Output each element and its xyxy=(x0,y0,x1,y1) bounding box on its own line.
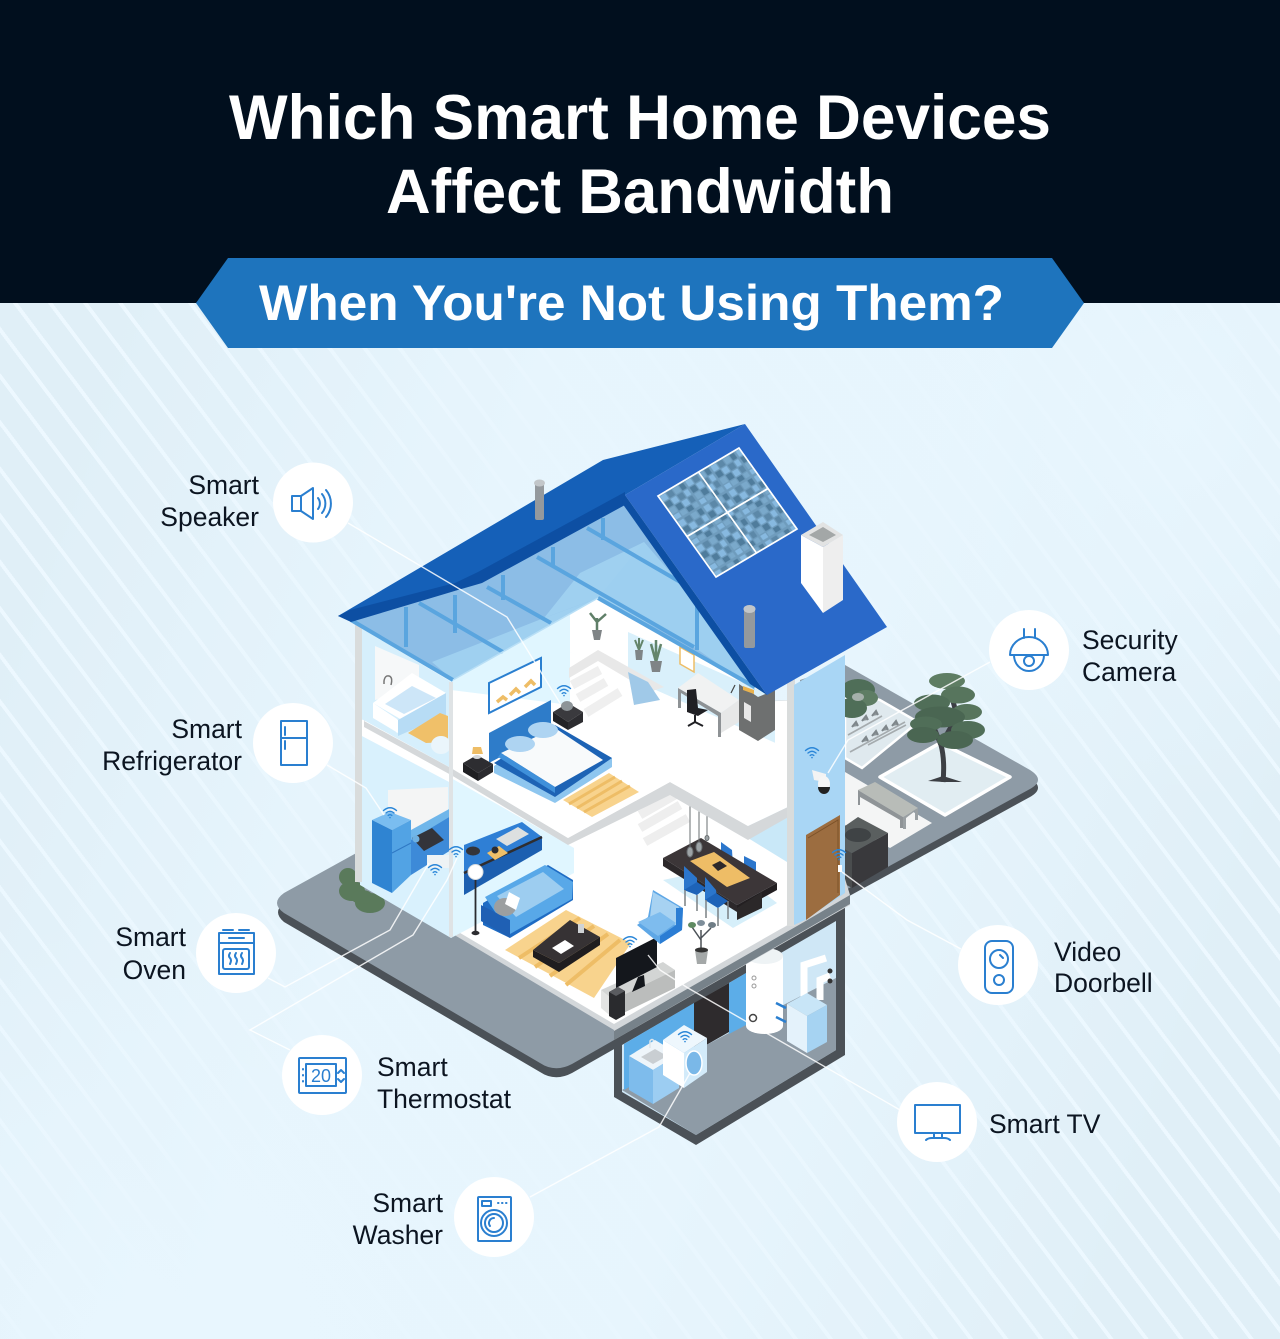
subtitle ribbon xyxy=(196,258,1084,348)
bedroom wall xyxy=(451,614,570,773)
wall posts xyxy=(355,624,795,937)
roof xyxy=(338,424,887,695)
living room rug xyxy=(505,910,631,998)
left roof plane xyxy=(338,424,745,620)
callout: security camera xyxy=(989,610,1178,690)
lower bedroom-side wall xyxy=(451,778,574,938)
callout: smart refrigerator: Refrigerator xyxy=(102,746,242,776)
video doorbell device xyxy=(838,865,842,872)
nightstand with smart speaker xyxy=(553,701,583,730)
patterned background xyxy=(0,303,1280,1339)
pendant lights xyxy=(687,805,709,857)
callout: smart tv: Smart TV xyxy=(989,1109,1101,1139)
connector lines xyxy=(250,523,990,1197)
callout: smart oven: Smart xyxy=(115,922,187,952)
tree planter xyxy=(880,743,1010,815)
washer xyxy=(663,1025,707,1088)
callout: video doorbell: Video xyxy=(1054,937,1121,967)
icon: washer xyxy=(478,1197,511,1241)
callout: smart refrigerator xyxy=(102,703,333,783)
indoor plants xyxy=(590,613,662,672)
tree xyxy=(907,673,985,782)
roof vents xyxy=(534,480,756,648)
garden bed with plants xyxy=(837,679,918,768)
lower stairs xyxy=(640,795,688,842)
title: Affect Bandwidth xyxy=(386,157,894,227)
callout: smart thermostat: Smart xyxy=(377,1052,448,1082)
armchair xyxy=(637,890,683,944)
icon: doorbell xyxy=(985,941,1013,993)
patio with bench xyxy=(845,772,932,848)
basement xyxy=(614,905,845,1145)
small wall frame xyxy=(680,647,694,672)
background light wash xyxy=(0,303,1280,1339)
icon: oven xyxy=(219,930,254,974)
callout: smart speaker: Smart xyxy=(188,470,260,500)
icon: refrigerator xyxy=(281,721,307,765)
illustration: cutaway house xyxy=(277,424,1038,1145)
counter and stove xyxy=(411,816,451,875)
callout: smart thermostat: 20 xyxy=(311,1066,331,1086)
header band xyxy=(0,0,1280,303)
chimney xyxy=(801,522,843,613)
bathroom wall and tub xyxy=(360,627,451,768)
basement top rim xyxy=(614,895,850,1040)
lower right wall xyxy=(748,800,787,862)
icon: thermostat xyxy=(299,1058,346,1093)
title xyxy=(229,83,1051,227)
soundbar speaker xyxy=(609,987,625,1020)
callout: video doorbell: Doorbell xyxy=(1054,968,1153,998)
bed xyxy=(489,700,612,803)
icon: television xyxy=(915,1105,960,1140)
callout: smart washer: Smart xyxy=(372,1188,444,1218)
callout: video doorbell xyxy=(958,925,1153,1005)
nightstand with lamp xyxy=(463,747,493,781)
callout: smart refrigerator: Smart xyxy=(171,714,243,744)
icon: speaker xyxy=(292,488,331,519)
icon: camera xyxy=(1010,629,1048,671)
security camera device xyxy=(812,770,830,794)
shrubs xyxy=(339,868,385,913)
dining chairs front xyxy=(684,866,728,926)
sink cabinet xyxy=(629,1040,679,1104)
blue wall sections xyxy=(624,973,746,1090)
floor plant xyxy=(688,920,716,964)
kitchen island xyxy=(464,822,542,895)
dining chairs back xyxy=(721,842,756,880)
bedroom rug xyxy=(563,773,639,817)
floor lamp xyxy=(468,864,483,935)
boiler with pipes xyxy=(776,958,832,1053)
solar panel xyxy=(658,448,797,577)
basement floor xyxy=(622,978,836,1135)
callout: smart thermostat: Thermostat xyxy=(377,1084,512,1114)
back walls of upper floor xyxy=(451,598,775,773)
kitchen wall xyxy=(360,735,451,938)
television xyxy=(616,937,657,992)
callout: smart washer: Washer xyxy=(353,1220,443,1250)
wifi signals xyxy=(384,686,846,1042)
title: Which Smart Home Devices xyxy=(229,83,1051,153)
back right wall xyxy=(570,598,775,750)
water heater xyxy=(746,948,783,1034)
subtitle ribbon: When You're Not Using Them? xyxy=(259,275,1004,331)
basement frame xyxy=(614,905,845,1145)
front door xyxy=(806,815,840,920)
callout: smart washer xyxy=(353,1177,534,1257)
right ground slab xyxy=(800,665,1038,923)
wall picture xyxy=(489,658,541,713)
basement wall xyxy=(622,921,836,1135)
bookshelf xyxy=(739,684,775,741)
AC unit xyxy=(845,817,888,888)
callout: smart thermostat xyxy=(282,1035,512,1115)
callout: security camera: Camera xyxy=(1082,657,1177,687)
upper floor slab xyxy=(364,652,792,845)
left ground slab xyxy=(277,851,630,1077)
callout: smart speaker: Speaker xyxy=(160,502,259,532)
sofa xyxy=(481,865,573,938)
lower floor xyxy=(362,700,850,1040)
dark door xyxy=(694,983,729,1052)
glass ceiling xyxy=(351,503,755,690)
TV console xyxy=(601,962,675,1018)
refrigerator xyxy=(372,812,411,893)
callout: smart oven: Oven xyxy=(123,955,186,985)
dining rug xyxy=(663,866,777,928)
right wall column xyxy=(794,655,845,925)
coffee table xyxy=(533,920,600,972)
dining table xyxy=(663,838,777,920)
callout: smart speaker xyxy=(160,462,353,542)
desk and office chair xyxy=(678,673,739,737)
right roof plane xyxy=(625,424,887,695)
callout: security camera: Security xyxy=(1082,625,1178,655)
callout: smart tv xyxy=(897,1082,1101,1162)
callout: smart oven xyxy=(115,913,276,993)
stairs and rail xyxy=(569,650,664,713)
